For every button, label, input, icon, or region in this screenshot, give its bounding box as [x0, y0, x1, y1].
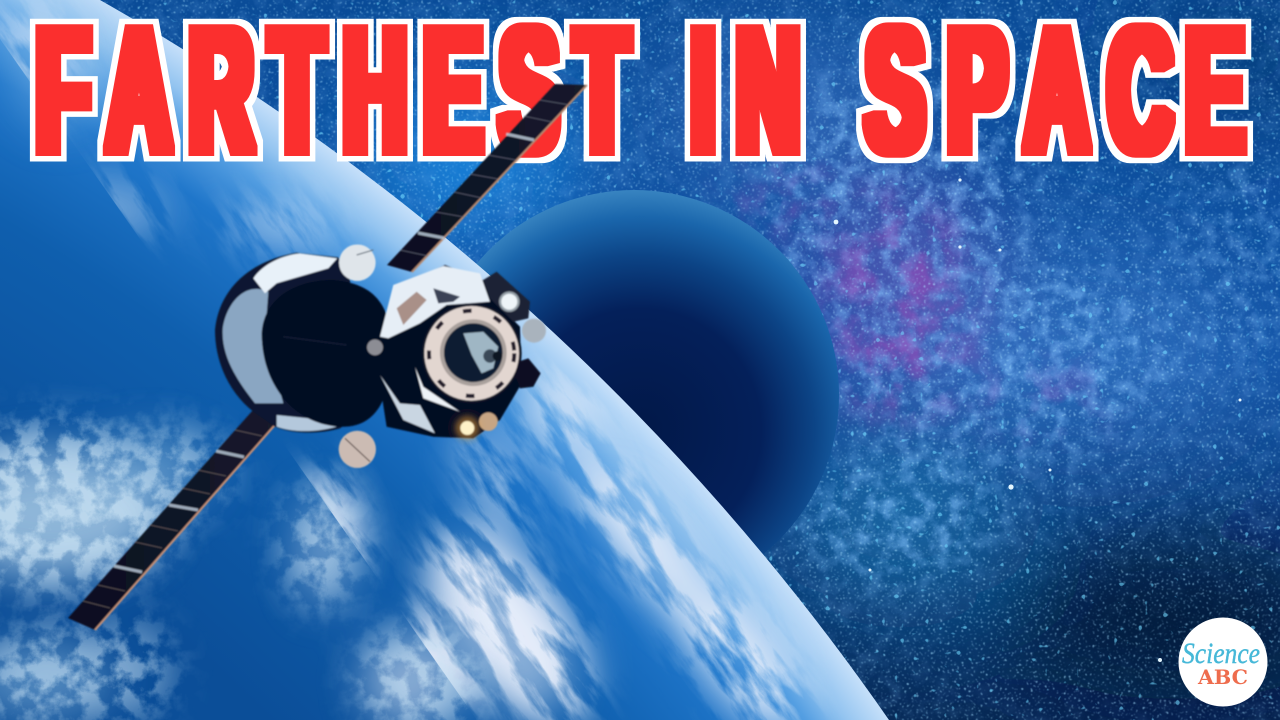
spacecraft [68, 84, 587, 630]
soft cloud base [0, 0, 744, 720]
moon [429, 190, 839, 600]
radiator disc top [339, 244, 376, 281]
lower lamp [479, 412, 498, 431]
docking ring [422, 303, 522, 403]
radiator disc bottom [339, 431, 376, 468]
logo: Science ABC: ABC [1197, 665, 1248, 689]
logo: Science ABC: Science [1182, 637, 1260, 670]
outer shell [215, 253, 357, 433]
upper instrument [483, 272, 530, 322]
forward module [378, 265, 522, 438]
dark hull [262, 280, 392, 427]
solar panel: lower [68, 410, 282, 630]
port [367, 339, 383, 355]
solar panel: upper [387, 84, 587, 272]
logo: Science ABC [1178, 618, 1268, 706]
spacecraft body [215, 244, 546, 468]
